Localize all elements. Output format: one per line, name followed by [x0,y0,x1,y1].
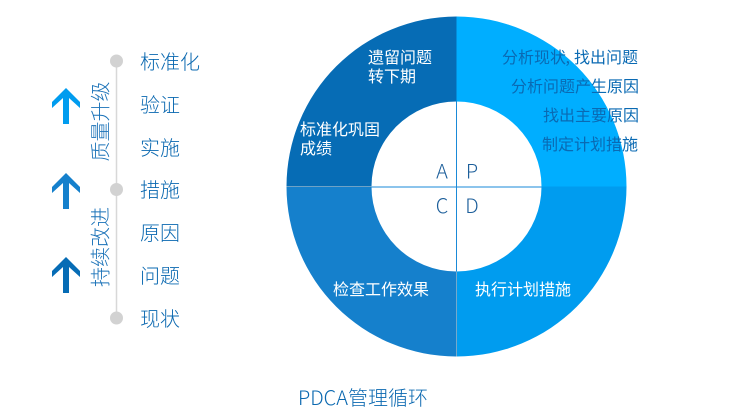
segment P: plan [456,16,626,186]
do text: 执行计划措施 [475,281,571,299]
timeline labels: 验证 [140,94,180,117]
plan text: 找出主要原因 [543,107,639,125]
timeline labels: 现状 [140,308,180,331]
center letters [436,156,479,219]
plan text: 找出问题 [574,49,638,67]
timeline labels: 实施 [140,137,180,160]
icon: arrow up light [52,88,80,124]
segment D: do [456,186,626,356]
plan text: 分析问题产生原因 [511,78,639,96]
center letters: A [436,156,448,184]
plan text: , [566,44,570,68]
act text left: 成绩 [300,140,332,158]
act text top [368,49,432,86]
act text top: 转下期 [368,68,416,86]
center letters: D [465,190,479,219]
act text top: 遗留问题 [368,49,432,67]
ring seams [286,186,456,356]
icon: arrow up dark [52,257,80,293]
center letters: C [436,190,448,219]
timeline labels: 标准化 [140,51,200,74]
timeline labels: 措施 [140,179,180,202]
timeline [110,54,123,324]
title: PDCA管理循环 [298,382,428,411]
plan text [502,44,639,154]
segment C: check [286,186,456,356]
timeline labels: 问题 [140,265,180,288]
icon: arrow up medium [52,173,80,209]
center cross [372,102,542,272]
act text left [300,121,380,158]
vertical label: quality upgrade: 质量升级 [90,82,112,162]
check text: 检查工作效果 [333,281,429,299]
act text left: 标准化巩固 [300,121,380,139]
plan text: 制定计划措施 [542,136,638,154]
segment A: act [286,16,456,186]
plan text: 分析现状 [502,49,566,67]
center letters: P [466,156,478,184]
timeline labels: 原因 [140,223,180,245]
vertical label: continuous improvement: 持续改进 [90,207,112,287]
PDCA ring [286,16,626,356]
timeline labels [140,51,200,331]
